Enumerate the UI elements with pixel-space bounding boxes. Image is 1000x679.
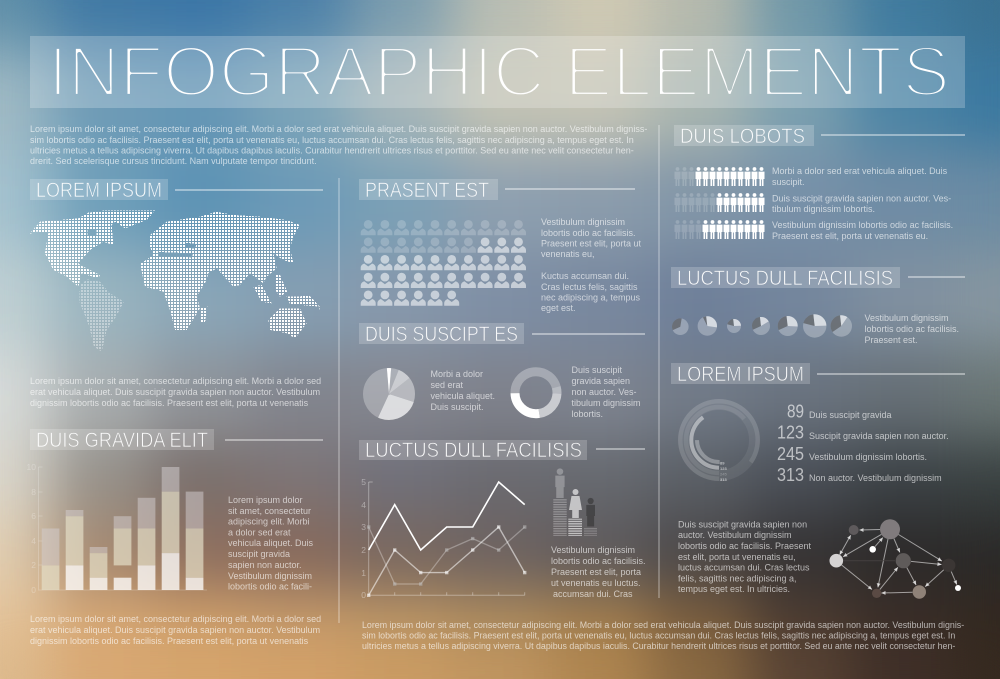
pictogram text: Kuctus accumsan dui. xyxy=(541,271,629,281)
line chart axis labels: 0 xyxy=(361,590,366,600)
row of small pie charts xyxy=(672,314,852,338)
small pies text: Praesent est. xyxy=(864,335,918,345)
intro paragraph: drerit. Sed scelerisque cursus tincidunt. Nam vulputate tempor tincidunt. xyxy=(30,156,317,166)
heading: duis suscipt es: DUIS SUSCIPT ES xyxy=(365,323,518,346)
heading: duis suscipt es xyxy=(359,323,645,346)
radial labels: 245 xyxy=(720,472,727,476)
standing people rows xyxy=(674,167,764,239)
map caption: Lorem ipsum dolor sit amet, consectetur adipiscing elit. Morbi a dolor sed xyxy=(30,376,321,386)
donut text: Duis suscipit xyxy=(572,365,623,375)
axis labels: 0 xyxy=(31,585,36,595)
bottom-left paragraph: dignissim lobortis odio ac facilisis. Praesent est elit, porta ut venenatis xyxy=(30,636,309,646)
podium people icon xyxy=(553,468,597,536)
radial labels: 123 xyxy=(720,466,727,471)
standing people text: Morbi a dolor sed erat vehicula aliquet. Duis xyxy=(772,166,948,176)
pictogram text: Vestibulum dignissim xyxy=(541,217,625,227)
statistics numbers: 245 xyxy=(777,444,804,464)
radial labels: 313 xyxy=(720,477,727,482)
network paragraph: tempus eget est. In ultricies. xyxy=(678,584,790,594)
small pies text: Vestibulum dignissim xyxy=(864,313,949,323)
statistics numbers: Suscipit gravida sapien non auctor. xyxy=(809,431,949,441)
bar chart text: vehicula aliquet. Duis xyxy=(228,538,314,548)
title: INFOGRAPHIC ELEMENTS xyxy=(48,33,950,112)
pictogram text: venenatis eu, xyxy=(541,249,595,259)
pie text: Duis suscipit. xyxy=(430,402,484,412)
heading: duis gravida elit: DUIS GRAVIDA ELIT xyxy=(36,429,208,452)
pictogram text: lobortis odio ac facilisis. xyxy=(541,228,636,238)
podium text: ut venenatis eu luctus. xyxy=(551,578,641,588)
podium text: Praesent est elit, porta xyxy=(551,567,641,577)
heading: lorem ipsum (right): LOREM IPSUM xyxy=(677,363,804,386)
bar chart text: adipiscing elit. Morbi xyxy=(228,516,310,526)
pie text: vehicula aliquet. xyxy=(430,391,495,401)
eurasia and africa xyxy=(140,212,300,330)
bottom-centre paragraph: ultricies metus a tellus adipiscing viverra. Ut dapibus dapibus iaculis. Curabitur hendrerit ultrices risus et porttitor. Sed eu ante nec velit consectetur hen- xyxy=(362,641,955,651)
heading: lorem ipsum (right) xyxy=(671,363,965,386)
podium text: accumsan dui. Cras xyxy=(553,589,633,599)
axis labels: 4 xyxy=(31,536,36,546)
south america xyxy=(79,279,124,352)
statistics numbers: 123 xyxy=(777,423,804,443)
column dividers xyxy=(339,125,659,623)
podium text: lobortis odio ac facilisis. xyxy=(551,556,646,566)
standing people text: tibulum dignissim lobortis. xyxy=(772,204,875,214)
heading: luctus dull facilisis (right): LUCTUS DULL FACILISIS xyxy=(677,267,893,290)
heading: lorem ipsum (map) xyxy=(30,179,323,202)
radial progress chart xyxy=(680,401,758,482)
heading: luctus dull facilisis (centre): LUCTUS DULL FACILISIS xyxy=(365,439,582,462)
network paragraph: luctus accumsan dui. Cras lectus xyxy=(678,562,810,572)
small pies text: lobortis odio ac facilisis. xyxy=(864,324,959,334)
pie text: Morbi a dolor xyxy=(430,369,483,379)
statistics numbers: Vestibulum dignissim lobortis. xyxy=(809,452,927,462)
standing people text: suscipit. xyxy=(772,177,805,187)
bottom-left paragraph: Lorem ipsum dolor sit amet, consectetur adipiscing elit. Morbi a dolor sed xyxy=(30,614,321,624)
heading: duis gravida elit xyxy=(30,429,323,452)
bar chart text: sit amet, consectetur xyxy=(228,506,311,516)
donut chart xyxy=(515,372,557,414)
dotted world map xyxy=(29,211,322,352)
bottom-left paragraph: erat vehicula aliquet. Duis suscipit gravida sapien non auctor. Vestibulum xyxy=(30,625,320,635)
pie text: sed erat xyxy=(430,380,464,390)
pictogram text: eget est. xyxy=(541,303,576,313)
network paragraph: felis, sagittis nec adipiscing a, xyxy=(678,574,797,584)
donut text: lobortis. xyxy=(572,409,603,419)
heading: prasent est xyxy=(359,179,635,202)
map caption: dignissim lobortis odio ac facilisis. Praesent est elit, porta ut venenatis xyxy=(30,398,309,408)
title panel xyxy=(30,36,965,108)
line chart axis labels: 2 xyxy=(361,545,366,555)
line chart axis labels: 5 xyxy=(361,477,366,487)
network paragraph: lobortis odio ac facilisis. Praesent xyxy=(678,541,812,551)
radial labels xyxy=(720,460,727,482)
axis labels: 8 xyxy=(31,487,36,497)
line chart axis labels xyxy=(361,477,366,600)
standing people text: Duis suscipit gravida sapien non auctor. Ves- xyxy=(772,194,951,204)
line chart axis labels: 1 xyxy=(361,568,366,578)
intro paragraph: Lorem ipsum dolor sit amet, consectetur adipiscing elit. Morbi a dolor sed erat vehicula aliquet. Duis suscipit gravida sapien non auctor. Vestibulum digniss- xyxy=(30,124,647,134)
bar chart text: a dolor sed erat xyxy=(228,528,291,538)
statistics numbers: Duis suscipit gravida xyxy=(809,410,892,420)
pictogram text: Cras lectus felis, sagittis xyxy=(541,282,638,292)
north america and greenland xyxy=(29,211,155,287)
pictogram text: nec adipiscing a, tempus xyxy=(541,292,641,302)
bottom-centre paragraph: sim lobortis odio ac facilisis. Praesent est elit, porta ut venenatis eu, luctus accumsan dui. Cras lectus felis, sagittis nec adipiscing a, tempus eget est. In xyxy=(362,630,955,640)
heading: prasent est: PRASENT EST xyxy=(365,179,489,202)
bottom-centre paragraph: Lorem ipsum dolor sit amet, consectetur adipiscing elit. Morbi a dolor sed erat vehicula aliquet. Duis suscipit gravida sapien non auctor. Vestibulum dignis- xyxy=(362,620,964,630)
axis labels: 6 xyxy=(31,511,36,521)
bar chart text: Vestibulum dignissim xyxy=(228,571,312,581)
network paragraph: est elit, porta ut venenatis eu, xyxy=(678,552,796,562)
intro paragraph: sim lobortis odio ac facilisis. Praesent est elit, porta ut venenatis eu, luctus accumsan dui. Cras lectus felis, sagittis nec adipiscing a, tempus eget est. In xyxy=(30,135,634,145)
stacked bar chart xyxy=(27,462,207,595)
bar chart text: suscipit gravida xyxy=(228,549,290,559)
statistics numbers: Non auctor. Vestibulum dignissim xyxy=(809,473,942,483)
intro paragraph: ultricies metus a tellus adipiscing viverra. Ut dapibus dapibus iaculis. Curabitur hendrerit ultrices risus et porttitor. Sed eu ante nec velit consectetur hen- xyxy=(30,146,634,156)
statistics numbers: 89 xyxy=(787,402,804,422)
radial labels: 89 xyxy=(720,460,725,466)
axis labels: 2 xyxy=(31,560,36,570)
network paragraph: Duis suscipit gravida sapien non xyxy=(678,520,807,530)
line chart xyxy=(361,477,526,600)
heading: duis lobots: DUIS LOBOTS xyxy=(680,125,805,148)
heading: duis lobots xyxy=(674,125,965,148)
donut text: gravida sapien xyxy=(572,376,630,386)
network paragraph: auctor. Vestibulum dignissim xyxy=(678,530,792,540)
standing people text: Praesent est elit, porta ut venenatis eu. xyxy=(772,231,928,241)
podium text: Vestibulum dignissim xyxy=(551,545,635,555)
axis labels: 10 xyxy=(27,462,36,472)
statistics numbers xyxy=(777,402,949,485)
bar chart text: Lorem ipsum dolor xyxy=(228,495,303,505)
map caption: erat vehicula aliquet. Duis suscipit gravida sapien non auctor. Vestibulum xyxy=(30,387,320,397)
donut text: non auctor. Ves- xyxy=(572,387,637,397)
pie chart xyxy=(376,381,402,407)
bar chart text: sapien non auctor. xyxy=(228,560,302,570)
islands and australia xyxy=(200,275,322,338)
statistics numbers: 313 xyxy=(777,465,804,485)
bar chart text: lobortis odio ac facili- xyxy=(228,582,312,592)
line chart axis labels: 4 xyxy=(361,500,366,510)
standing people text: Vestibulum dignissim lobortis odio ac facilisis. xyxy=(772,220,953,230)
line chart axis labels: 3 xyxy=(361,522,366,532)
heading: lorem ipsum (map): LOREM IPSUM xyxy=(36,179,162,202)
network diagram xyxy=(830,519,961,599)
pictogram text: Praesent est elit, porta ut xyxy=(541,238,642,248)
axis labels xyxy=(27,462,36,595)
people pictogram grid xyxy=(361,220,526,306)
donut text: tibulum dignissim xyxy=(572,398,641,408)
